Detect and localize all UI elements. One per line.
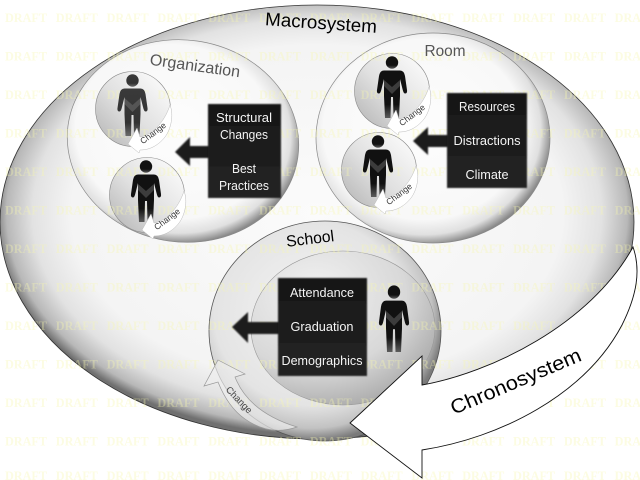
panel: organization factors box [208, 104, 281, 198]
small circle: organization bottom [110, 158, 184, 232]
watermark: DRAFT grid: DRAFT DRAFT DRAFT DRAFT DRAFT DRAFT DRAFT DRAFT DRAFT DRAFT DRAFT DRAFT DRAFT [5, 319, 640, 333]
panel: room circle [316, 33, 550, 243]
watermark: DRAFT grid: DRAFT DRAFT DRAFT DRAFT DRAFT DRAFT DRAFT DRAFT DRAFT DRAFT DRAFT DRAFT DRAFT [5, 50, 640, 64]
panel: organization factors box: Best [232, 162, 257, 176]
icon: person room bottom [363, 135, 393, 197]
arrow: change organization bottom: Change [152, 206, 182, 232]
watermark: DRAFT grid: DRAFT DRAFT DRAFT DRAFT DRAFT DRAFT DRAFT DRAFT DRAFT DRAFT DRAFT DRAFT DRAFT [5, 358, 640, 372]
heading: Macrosystem: Macrosystem [265, 8, 378, 37]
small circle: room bottom [342, 132, 416, 208]
arrow: change room bottom: Change [384, 181, 414, 207]
arrow: change organization bottom [142, 191, 186, 239]
arrow: change room bottom [374, 166, 418, 214]
watermark: DRAFT grid: DRAFT DRAFT DRAFT DRAFT DRAFT DRAFT DRAFT DRAFT DRAFT DRAFT DRAFT DRAFT DRAFT [5, 434, 640, 448]
icon: person organization top [117, 74, 148, 136]
watermark: DRAFT grid: DRAFT DRAFT DRAFT DRAFT DRAFT DRAFT DRAFT DRAFT DRAFT DRAFT DRAFT DRAFT DRAFT [5, 204, 640, 218]
heading: Organization: Organization [149, 52, 241, 81]
panel: room factors box: Climate [466, 168, 509, 182]
arrow: black arrow school [232, 312, 280, 343]
arrow: black arrow room [413, 127, 449, 155]
arrow: change school [204, 360, 297, 430]
heading: School: School [285, 228, 335, 251]
panel: school factors box: Attendance [290, 286, 354, 300]
arrow: black arrow organization [175, 137, 210, 166]
arrow: change room top: Change [397, 102, 427, 128]
panel: school factors box [278, 278, 367, 376]
arrow: change organization top [128, 105, 172, 153]
icon: person room top [377, 56, 407, 118]
watermark: DRAFT grid: DRAFT DRAFT DRAFT DRAFT DRAFT DRAFT DRAFT DRAFT DRAFT DRAFT DRAFT DRAFT DRAFT [5, 126, 640, 140]
panel: room factors box: Resources [459, 100, 515, 114]
arrow: change school: Change [223, 385, 254, 416]
watermark: DRAFT grid: DRAFT DRAFT DRAFT DRAFT DRAFT DRAFT DRAFT DRAFT DRAFT DRAFT DRAFT DRAFT DRAFT [5, 242, 640, 256]
panel: room factors box: Distractions [454, 134, 520, 148]
panel: organization circle [54, 25, 312, 257]
panel: school factors box: Demographics [282, 354, 362, 368]
heading: Room: Room [424, 43, 466, 60]
small circle: room top [354, 54, 430, 128]
panel: room factors box [447, 93, 527, 188]
watermark: DRAFT grid: DRAFT DRAFT DRAFT DRAFT DRAFT DRAFT DRAFT DRAFT DRAFT DRAFT DRAFT DRAFT DRAFT [5, 11, 640, 25]
watermark: DRAFT grid: DRAFT DRAFT DRAFT DRAFT DRAFT DRAFT DRAFT DRAFT DRAFT DRAFT DRAFT DRAFT DRAFT [5, 88, 640, 102]
icon: person school [379, 285, 409, 352]
panel: organization factors box: Structural [216, 111, 272, 125]
panel: school factors box: Graduation [290, 320, 354, 334]
panel: organization factors box: Changes [220, 128, 268, 142]
small circle: organization top [96, 72, 170, 146]
arrow: chronosystem [350, 247, 637, 478]
arrow: change organization top: Change [138, 120, 168, 146]
watermark: DRAFT grid: DRAFT DRAFT DRAFT DRAFT DRAFT DRAFT DRAFT DRAFT DRAFT DRAFT DRAFT DRAFT DRAFT [5, 165, 640, 179]
icon: person organization bottom [131, 160, 161, 222]
watermark: DRAFT grid: DRAFT DRAFT DRAFT DRAFT DRAFT DRAFT DRAFT DRAFT DRAFT DRAFT DRAFT DRAFT DRAFT [5, 396, 640, 410]
arrow: change room top [387, 87, 431, 135]
inner school circle [251, 251, 435, 405]
panel: organization factors box: Practices [219, 179, 269, 193]
label: Chronosystem: Chronosystem [447, 345, 585, 419]
watermark: DRAFT grid: DRAFT DRAFT DRAFT DRAFT DRAFT DRAFT DRAFT DRAFT DRAFT DRAFT DRAFT DRAFT DRAFT [5, 280, 640, 294]
panel: school circle [209, 221, 441, 441]
